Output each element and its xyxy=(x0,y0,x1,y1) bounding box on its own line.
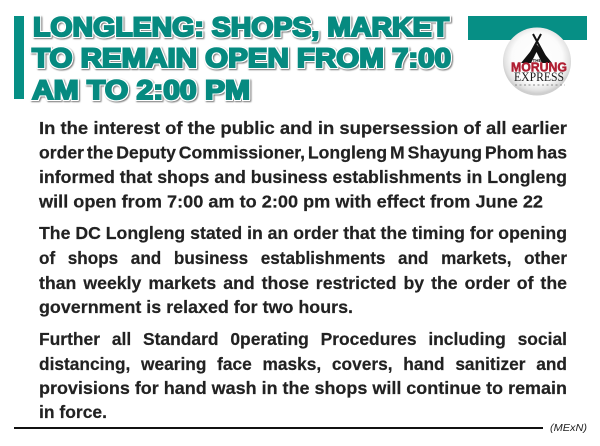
paragraph 3 xyxy=(39,329,567,422)
paragraph 2 xyxy=(39,223,567,317)
title: AM TO 2:00 PM xyxy=(32,75,250,105)
logo disc xyxy=(503,28,571,96)
left accent bar xyxy=(14,16,24,99)
paragraph 1: will open from 7:00 am to 2:00 pm with effect from June 22 xyxy=(38,192,543,212)
paragraph 2: of shops and business establishments and markets, other xyxy=(39,248,567,268)
title: TO REMAIN OPEN FROM 7:00 xyxy=(32,43,451,73)
top right accent bar xyxy=(468,16,587,40)
logo: The Morung Express xyxy=(503,28,571,96)
paragraph 2: The DC Longleng stated in an order that the timing for opening xyxy=(39,223,567,243)
paragraph 2: government is relaxed for two hours. xyxy=(39,297,353,317)
source credit: (MExN) xyxy=(550,422,587,434)
title xyxy=(32,12,451,105)
title: LONGLENG: SHOPS, MARKET xyxy=(33,12,449,42)
paragraph 1 xyxy=(38,118,567,212)
paragraph 3: distancing, wearing face masks, covers, hand sanitizer and xyxy=(39,354,567,374)
paragraph 2: than weekly markets and those restricted by the order of the xyxy=(39,273,567,293)
paragraph 3: provisions for hand wash in the shops will continue to remain xyxy=(39,378,567,398)
paragraph 1: order the Deputy Commissioner, Longleng M Shayung Phom has xyxy=(39,142,567,162)
icon: tent with crossed spears xyxy=(521,34,552,63)
logo word: Morung: MORUNG xyxy=(511,60,567,74)
logo word: Express: EXPRESS xyxy=(514,70,564,84)
paragraph 3: in force. xyxy=(39,402,107,422)
paragraph 1: informed that shops and business establishments in Longleng xyxy=(39,167,567,187)
paragraph 3: Further all Standard 0perating Procedures including social xyxy=(39,329,567,349)
logo word: The: THE xyxy=(532,58,542,63)
paragraph 1: In the interest of the public and in supersession of all earlier xyxy=(39,118,567,138)
